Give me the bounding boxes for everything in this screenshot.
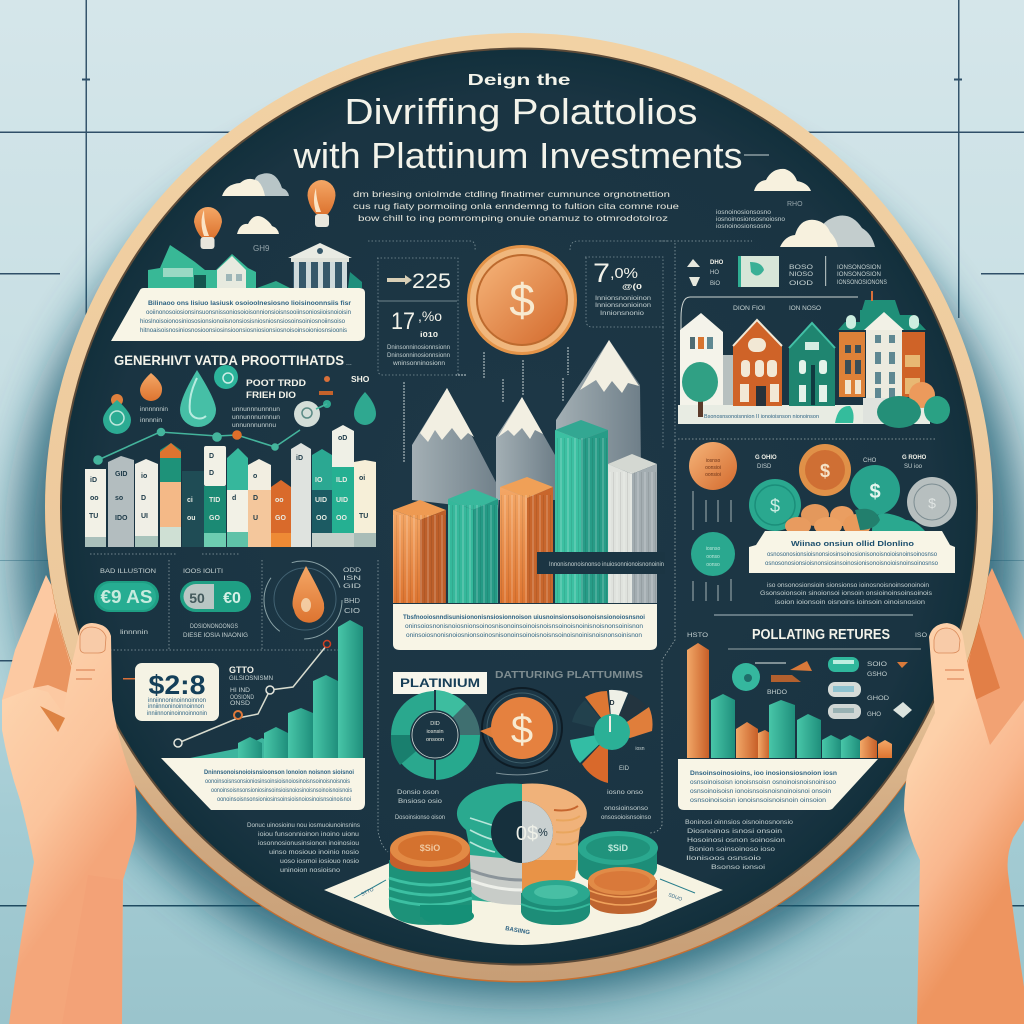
text block: right of title: [716, 210, 786, 230]
bar chart: property columns: OO: [336, 515, 347, 522]
bar chart: property columns: iD: [296, 455, 303, 462]
intro text block: bow chill to ing pomromping onuie onamuz to otmrodotolroz: [358, 213, 668, 223]
panel: center stats right: [570, 241, 668, 448]
panel: coin section: isoion ioionsoin oisnoins ioinsoin oinoisnosion: [775, 600, 925, 606]
panel: pill row: DIESE IOSIA INAONIG: [183, 633, 248, 639]
bar chart: returns: [687, 643, 892, 758]
pill: white and teal: €0: [223, 590, 241, 607]
chart labels: HI IND: [230, 688, 251, 694]
hand: right front: [904, 623, 1024, 1024]
bar chart: property columns: UID: [315, 497, 327, 504]
info row: right section: BiO: [710, 281, 720, 287]
icon: teal badge: oonso: [706, 554, 720, 560]
coin stack: left: [389, 831, 474, 925]
text: ...: [346, 360, 352, 367]
bar chart: property columns: oo: [90, 495, 99, 502]
pie chart: segments: [570, 690, 653, 783]
stacked chip donut: %: [538, 827, 548, 839]
icon: cloud small: [237, 216, 279, 234]
floor labels: [354, 879, 695, 936]
callout: $2:8 stat: inniinnoninoinnoinnonin: [147, 711, 207, 717]
panel: center stats left: 17: [391, 308, 415, 335]
panel: pill row: IOOS IOLITI: [183, 569, 223, 575]
coin stack: right orange: [588, 867, 657, 914]
coin stack: right teal: [578, 831, 658, 884]
panel: center stats right: ,0%: [610, 265, 638, 282]
heading: platinum right: DATTURING PLATTUMIMS: [495, 670, 643, 681]
drops row: [103, 365, 376, 434]
icon: teal badge: [691, 532, 735, 576]
panel: coin section: G ROHO: [902, 455, 927, 461]
panel: coin section: CHO: [863, 458, 877, 464]
heading: platinum: PLATINIUM: [400, 676, 480, 690]
heading: platinum: [393, 672, 487, 694]
icon: orange badge: oonsioi: [705, 465, 721, 471]
title: [292, 72, 769, 176]
drops row: SHO: [351, 374, 370, 384]
bar chart: property columns: GO: [209, 515, 220, 522]
bar chart: property columns: D: [209, 470, 214, 477]
chart icons: returns: [732, 657, 912, 719]
text block: right of title: iosnoinosionsosnoiosno: [716, 217, 786, 223]
panel: pill row: ISN: [343, 576, 361, 582]
icon: cloud right large: [780, 216, 875, 247]
panel: pill row: ODD: [343, 568, 362, 574]
pill: teal: [94, 581, 159, 612]
chart labels: [229, 665, 273, 707]
section divider top right: [660, 241, 752, 440]
bar chart: property columns: oi: [359, 475, 365, 482]
drops row: unnunnnunnnun: [232, 407, 280, 413]
bank building: [257, 243, 362, 289]
panel: growth caption: [161, 758, 365, 810]
info row: right section: IONSONOSION: [837, 272, 881, 278]
title: Deign the: [468, 72, 571, 89]
pill: teal: €9 AS: [100, 587, 152, 607]
text block: under platinum: Diosnoinos isnosi onsoin: [687, 829, 782, 835]
bar: silver: [608, 454, 657, 603]
panel: center stats left: Dninsonninosionnsionn: [387, 353, 450, 359]
bar chart: property columns: IO: [315, 477, 323, 484]
coin stack: center teal: [521, 880, 590, 925]
caption band: Innonisnonoisnonso inuiosonnionoisnonoinin: [549, 562, 664, 568]
chart labels: OOSIOND: [230, 695, 255, 701]
icon: orange dollar circle: $: [511, 708, 533, 752]
mansion: [838, 291, 926, 423]
coin stack: right teal: $SiD: [608, 843, 629, 853]
banner: osnosonosionsioisnonsiosinsoinosionisonoisnoioisnoinsoinosnso: [765, 561, 939, 567]
info row: right section: BOSO: [789, 265, 813, 271]
panel: growth caption: Dninnsonoisnoioisnsioonson lonoion noisnon sioisnoi: [204, 770, 354, 776]
text block: lower left: Donuc uinosioinu nou iosmuoiunoinsnins: [247, 823, 360, 829]
donut labels: [395, 790, 652, 821]
bushes: [835, 382, 950, 428]
bar chart: property columns: OO: [316, 515, 327, 522]
chart icons: returns: GSHO: [867, 672, 887, 678]
chart labels: ONSD: [230, 701, 251, 707]
coin stack: left: $SiO: [420, 843, 440, 853]
info row: right section: HO: [710, 270, 719, 276]
donut labels: onsosoioisnsoinso: [601, 815, 652, 821]
icon: teal badge: iosnso: [706, 546, 720, 552]
houses left: [148, 245, 256, 288]
panel: growth caption: oonoinsoisnsonsioniosinsoinsioisnoiosinoisnsoinoisnoisnois: [211, 788, 352, 794]
chart labels: GTTO: [229, 665, 254, 675]
pill: white and teal: 50: [189, 590, 205, 606]
panel: center stats right: Innionsnonio: [600, 311, 645, 317]
icon: large dollar coin: [467, 245, 577, 355]
panel: returns caption: osnsoinoisoisn ionoisnsoisnoisnoinoisnoi onsoin: [690, 789, 831, 795]
bar chart: property columns: oD: [338, 435, 347, 442]
bar chart: property columns: IDO: [115, 515, 128, 522]
coin: orange: $: [820, 461, 830, 481]
callout: $2:8 stat: inniinnoninoinnoinnon: [148, 704, 204, 710]
donut chart: teal: [391, 690, 480, 780]
pie chart: segments: D: [609, 700, 615, 707]
panel: returns caption: Dnsoinsoinosioins, ioo inosionsiosnoion iosn: [690, 771, 837, 777]
bar: teal two: [555, 420, 608, 603]
panel: center stats right: 7: [593, 258, 610, 288]
text block: under platinum: Bsonso ionsoi: [711, 865, 765, 871]
floor labels: BASIING: [505, 926, 531, 936]
mountains: [412, 340, 641, 510]
icon: orange dot: [111, 394, 123, 406]
donut labels: Bnsioso osio: [398, 799, 443, 805]
heading: returns: POLLATING RETURES: [752, 627, 890, 643]
text block: lower left: ioiou funsonnioinon inoino uionu: [258, 832, 359, 838]
bar chart: property columns: iD: [90, 477, 97, 484]
intro text block: [353, 189, 679, 223]
icon: teal badge: oonso: [706, 562, 720, 568]
white house: [680, 313, 733, 405]
icon: cloud right small: [754, 169, 811, 191]
bar chart: property columns: TU: [359, 513, 368, 520]
bar chart: property columns: TID: [209, 497, 220, 504]
info row: right section: IONSONOSIONONS: [837, 280, 887, 286]
text block: lower left: uoso iosmoi iosiouo nosio: [280, 859, 360, 865]
text block: right of title: iosnoinosionsosno: [716, 210, 772, 216]
text block: under platinum: [685, 820, 794, 871]
icon: large dollar coin: $: [509, 274, 535, 326]
text block: right of title: iosnoinosionsosno: [716, 224, 772, 230]
floor labels: STTO: [360, 887, 375, 898]
panel: pill row: BHD: [344, 598, 360, 605]
bar chart: property columns: U: [253, 515, 258, 522]
drops row: unnunnnunnnu: [232, 423, 276, 429]
icon: orange dollar circle: [480, 688, 562, 775]
pie chart: segments: iosn: [635, 746, 645, 752]
icon: orange badge: iosnso: [706, 458, 720, 464]
drops row: FRIEH DIO: [246, 390, 296, 400]
pill: white and teal: [180, 581, 251, 612]
bar chart: property columns: GID: [115, 471, 127, 478]
caption band: [537, 552, 665, 574]
intro text block: cus rug fiaty pormoiing onla enndemng to fultion cita comne roue: [353, 201, 679, 211]
coin: teal right: [850, 465, 900, 515]
icon: cloud left: [222, 173, 289, 196]
bar chart: property columns: D: [253, 495, 258, 502]
icon: orange drop with rings: [264, 561, 342, 639]
panel: center stats left: Dninsonninosionnsionn: [387, 345, 450, 351]
icon: small drop right: [354, 392, 376, 425]
floor labels: SDUO: [667, 892, 683, 903]
panel: returns caption: osnsoinoisoisn ionoisnsoisn osnoinoisnoisnoinisoo: [690, 780, 837, 786]
bar chart: property columns: TU: [89, 513, 98, 520]
panel: center caption: [393, 604, 657, 650]
bar chart: property columns: ILD: [336, 477, 347, 484]
text block: lower left: uninoion nosioisno: [280, 868, 341, 874]
callout: $2:8 stat: [123, 663, 219, 721]
panel: coin section: Gsonsoionsoin sinoionsoi ionsoin onsioinoinsoinsoinois: [760, 591, 932, 597]
bar: orange one: [393, 500, 446, 603]
panel: coin section: iso onsonosionsioin sionsionso ioinosnoisnoinsonoinoin: [767, 583, 929, 589]
hand behind frame: right: [950, 568, 1024, 780]
text block: lower left: iosonnosionusinsionon inoinosiou: [258, 841, 359, 847]
panel: center stats left: wninsonninosionn: [392, 361, 445, 367]
info row: right section: DHO: [710, 260, 724, 266]
floor panel: [324, 862, 723, 945]
stacked chip donut: [457, 783, 587, 905]
panel: center stats right: @(0: [622, 284, 642, 291]
panel: returns caption: [678, 759, 878, 810]
bar chart: property columns: ou: [187, 515, 196, 522]
info row: right section: OIOD: [789, 281, 814, 287]
text block: lower left: uinso mosiouo inoinio nosio: [269, 850, 360, 856]
illustration: town buildings: Bsonosnsonoisnnion II ionoioisnson nionoinson: [704, 414, 819, 420]
icon: large drop: [180, 370, 216, 427]
bar chart: property columns: UI: [141, 513, 148, 520]
panel: center caption: oninsoiosnonisnoiosnionsoinosnisonoinsoinoisnoisnsoinoisnoinisnoisnonsoinisnon: [405, 624, 643, 630]
coin: silver: [907, 477, 957, 527]
callout: $2:8 stat: $2:8: [148, 670, 206, 700]
illustration: town buildings: [678, 291, 950, 428]
bar chart: property columns: o: [253, 473, 257, 480]
chart icons: returns: GHO: [867, 712, 881, 718]
bar chart: property columns: ci: [187, 497, 193, 504]
bar chart: property columns: so: [115, 495, 123, 502]
banner: osnosonosionsioisnonsiosinsoinosionisonoisnoioisnoinsoinosnso: [767, 552, 938, 558]
coin: teal right: $: [869, 481, 881, 503]
title: with Plattinum Investments: [292, 135, 742, 176]
bar: teal one: [448, 489, 498, 603]
coin: teal left: [749, 479, 801, 531]
donut chart: teal: onsoon: [426, 737, 444, 743]
hand: left front: [2, 623, 136, 1024]
icon: drop orange: [140, 373, 162, 401]
coin: orange: [799, 444, 851, 496]
icon: teal badge: [214, 365, 238, 389]
text block: lower left: [247, 823, 360, 874]
label: RHO: [787, 201, 803, 208]
small labels: POOT TRDD: [246, 378, 307, 388]
line and bar chart: growth: [174, 620, 363, 758]
intro text block: dm briesing oniolmde ctdling finatimer cumnunce orgnotnettion: [353, 189, 670, 199]
callout: $2:8 stat: inniinnoninoinnoinnon: [148, 698, 206, 704]
panel: pill row: BAD ILLUSTION: [100, 569, 156, 575]
panel: intro banner: Bilinaoo ons lisiuo lasiusk osoioolnesiosno lioisinoonnsiis fisr: [148, 301, 352, 307]
coin: silver: $: [928, 495, 936, 511]
panel: growth caption: oonoinsoisnsonsioniosinsoinsioisnoiosinoisnsoinoisnoi: [217, 797, 351, 803]
panel: center caption: oninsoiosnonisnoiosnionsoinosnisonoinsoinoisnoisnsoinoisnoinisnoisnonsoinisnon: [406, 633, 642, 639]
icon: orange badge: oonsioi: [705, 472, 721, 478]
info row: right section: IONSONOSION: [837, 265, 881, 271]
panel: intro banner: [111, 288, 365, 341]
panel: intro banner: hitnoaisoisnosiniosnosioonsiosinsioonsiosniosionsiosnoisoinsoioniosnsioonis: [140, 328, 347, 334]
info row: right section: NIOSO: [789, 272, 813, 278]
panel: returns caption: osnsoinoisoisn ionoisnsoisnoisnoin oinsoion: [690, 798, 826, 804]
arrows around coin: [404, 347, 568, 462]
coin pile: [785, 504, 925, 536]
banner: Wiinao onsiun ollid Dlonlino: [791, 539, 914, 548]
orange house: [733, 320, 782, 406]
drops row: innnnnnin: [140, 407, 168, 413]
icon: orange badge: [689, 442, 737, 490]
text block: under platinum: Hosoinosi osnon soinosion: [687, 838, 785, 844]
line chart over bars: [94, 404, 327, 464]
bar chart: property columns: io: [141, 473, 147, 480]
heading: returns: HSTO: [687, 633, 708, 639]
bar chart: property columns: D: [141, 495, 146, 502]
illustration: town buildings: DION FIOI: [733, 306, 765, 312]
panel: pill row: linnnnin: [120, 630, 148, 636]
bar chart: property columns: [85, 425, 376, 547]
bar chart: isometric asset columns: [393, 420, 657, 603]
pie chart: segments: EID: [619, 766, 630, 772]
donut labels: Donsio oson: [397, 790, 439, 796]
panel: center stats left: [368, 241, 475, 375]
banner: [749, 531, 955, 573]
chart icons: returns: SOIO: [867, 662, 887, 668]
illustration: town buildings: ION NOSO: [789, 306, 821, 312]
icon: drop teal: [103, 400, 131, 434]
panel: intro banner: hioslnoisoionosiniososionsionoiisnonsiosisniosniosnsiosoinsoiniosnoiinsoiso: [140, 319, 346, 325]
panel: pill row: DOSIONONOONGS: [190, 624, 238, 630]
heading: returns: [687, 615, 927, 649]
bar chart: property columns: oo: [275, 497, 284, 504]
donut chart: teal: iosnsin: [426, 729, 444, 735]
heading: left section: GENERHIVT VATDA PROOTTIHATDS: [114, 353, 344, 368]
bar: orange two: [500, 477, 553, 603]
tree: [682, 362, 718, 417]
panel: center stats right: Innionsnonioinon: [595, 303, 651, 309]
drops row: unnunnnunnnun: [232, 415, 280, 421]
panel: pill row: [90, 554, 388, 852]
panel: growth caption: oonoinsoisnsonsioniosinsoinsioisnoiosinoisnsoinoisnoisnois: [205, 779, 350, 785]
info row: right section: [687, 256, 887, 287]
heading: returns: ISO: [915, 633, 927, 639]
bar chart: property columns: d: [232, 495, 236, 502]
chart labels: GILSIOSNISMN: [229, 676, 273, 682]
bar chart: property columns: GO: [275, 515, 286, 522]
stacked chip donut: 0$: [516, 823, 538, 845]
icon: bulb left: [194, 207, 222, 249]
bar chart: property columns: D: [209, 453, 214, 460]
panel: center stats left: i010: [420, 332, 438, 339]
panel: pill row: GID: [343, 584, 362, 590]
panel: coin section: G OHIO: [755, 455, 777, 461]
drops row: innnnin: [140, 418, 162, 424]
chart icons: returns: BHDO: [767, 690, 787, 696]
panel: pill row: CIO: [344, 608, 361, 615]
donut labels: Dosoinsionso oison: [395, 815, 445, 821]
icon: bulb right: [307, 180, 336, 227]
icon: white badge: [294, 401, 320, 427]
text block: under platinum: Bonion soinsoinoso ioso: [689, 847, 776, 853]
panel: center caption: Tbsfnooiosnndisunisiononisnsiosionnoison uiusnoinsionsoisonoisnsionoiosnsnoi: [403, 615, 645, 621]
text block: under platinum: Boninosi oinnsios oisnoinosnonsio: [685, 820, 794, 826]
panel: coin section: [650, 439, 957, 833]
donut labels: onosioinsonso: [604, 806, 649, 812]
panel: coin section: DISD: [757, 464, 772, 470]
panel: intro banner: ooiinonosoiosionsinsuonsnissoniosoioisonnionsioisnsooiinsoniosiioisnoioisin: [146, 310, 351, 316]
teal house: [789, 323, 835, 406]
hand behind frame: left: [2, 575, 90, 760]
donut labels: iosno onso: [607, 790, 644, 796]
chart icons: returns: GHOD: [867, 696, 890, 702]
panel: center stats right: Innionsnonioinon: [595, 296, 651, 302]
panel: coin section: SU ioo: [904, 464, 923, 470]
panel: center stats left: 225: [412, 270, 451, 293]
title: Divriffing Polattolios: [344, 91, 698, 132]
donut chart: teal: DID: [430, 721, 440, 727]
text block: under platinum: Ilonisoos osnsoio: [686, 856, 762, 862]
bar chart: property columns: UID: [336, 497, 348, 504]
label: GH9: [253, 244, 270, 253]
panel: center stats left: ,%o: [418, 308, 442, 324]
coin: teal left: $: [770, 496, 780, 516]
